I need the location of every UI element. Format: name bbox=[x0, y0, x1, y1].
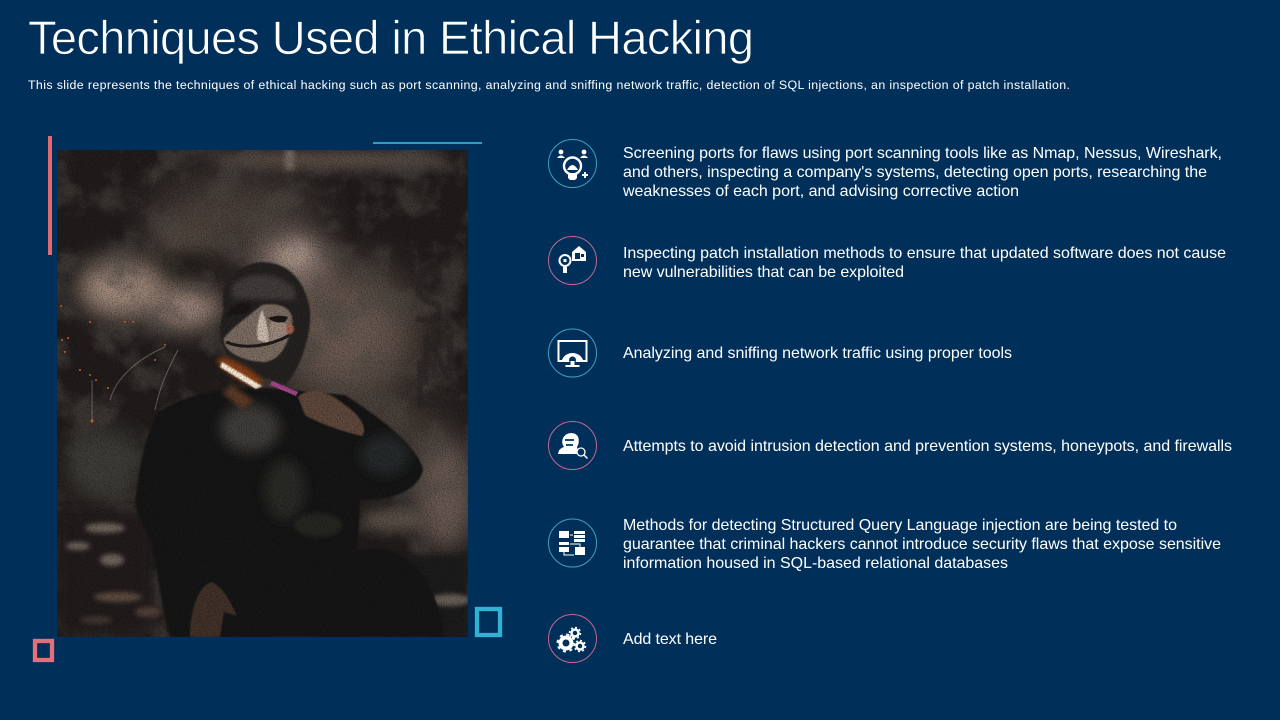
accent square: teal bbox=[477, 609, 500, 635]
text bbox=[623, 517, 1221, 572]
text: Screening ports for flaws using port scanning tools like as Nmap, Nessus, Wireshark, bbox=[623, 145, 1222, 162]
lower left dark area and rubble bbox=[67, 427, 143, 503]
photo: hooded hacker in mask with smoke bbox=[57, 150, 477, 637]
text: Attempts to avoid intrusion detection and prevention systems, honeypots, and firewalls bbox=[623, 438, 1232, 455]
cloud texture bbox=[57, 150, 468, 637]
item 1: port scanning bbox=[548, 140, 1222, 200]
text: weaknesses of each port, and advising corrective action bbox=[622, 183, 1019, 200]
text bbox=[623, 245, 1226, 281]
lower hand bbox=[190, 582, 237, 637]
item 5: SQL injection bbox=[548, 517, 1221, 572]
item 3: network traffic bbox=[548, 329, 1012, 377]
accent square: pink bbox=[35, 641, 52, 660]
icon: three gears bbox=[548, 614, 596, 662]
text: Analyzing and sniffing network traffic using proper tools bbox=[623, 345, 1012, 362]
scarf smoke on chest bbox=[220, 404, 280, 452]
sparks bbox=[60, 305, 166, 422]
text: guarantee that criminal hackers cannot introduce security flaws that expose sensitive bbox=[623, 536, 1221, 553]
text: Add text here bbox=[623, 631, 717, 648]
wall graffiti bbox=[416, 273, 450, 405]
mask bbox=[224, 304, 292, 362]
icon: masked hacker with magnifier bbox=[548, 422, 596, 470]
text: Inspecting patch installation methods to ensure that updated software does not cause bbox=[623, 245, 1226, 262]
accent bar: teal horizontal bbox=[373, 142, 482, 144]
icon: monitor with gear bbox=[548, 329, 596, 377]
item 4: intrusion detection bbox=[548, 422, 1232, 470]
lower right ground bbox=[361, 509, 429, 531]
item 6: add text bbox=[548, 614, 717, 662]
icon: people and light bulb bbox=[548, 140, 596, 188]
icon: database flow diagram bbox=[548, 519, 596, 567]
icon: magnifier and building bbox=[548, 236, 596, 284]
film grain bbox=[57, 150, 468, 637]
text: new vulnerabilities that can be exploited bbox=[623, 264, 904, 281]
text bbox=[622, 145, 1222, 200]
flare bbox=[214, 354, 265, 390]
upper hand bbox=[298, 391, 364, 436]
hood bbox=[220, 262, 310, 385]
subtitle: This slide represents the techniques of ethical hacking such as port scanning, analyzing and sniffing network traffic, detection of SQL injections, an inspection of patch installation. bbox=[28, 78, 1070, 92]
text: and others, inspecting a company's systems, detecting open ports, researching the bbox=[623, 164, 1207, 181]
text: Methods for detecting Structured Query Language injection are being tested to bbox=[623, 517, 1177, 534]
title: Techniques Used in Ethical Hacking bbox=[28, 11, 754, 64]
figure body bbox=[135, 387, 445, 637]
smoke bbox=[150, 177, 320, 253]
accent bar: pink vertical bbox=[48, 136, 52, 255]
item 2: patch installation bbox=[548, 236, 1226, 284]
text: information housed in SQL-based relational databases bbox=[623, 555, 1008, 572]
